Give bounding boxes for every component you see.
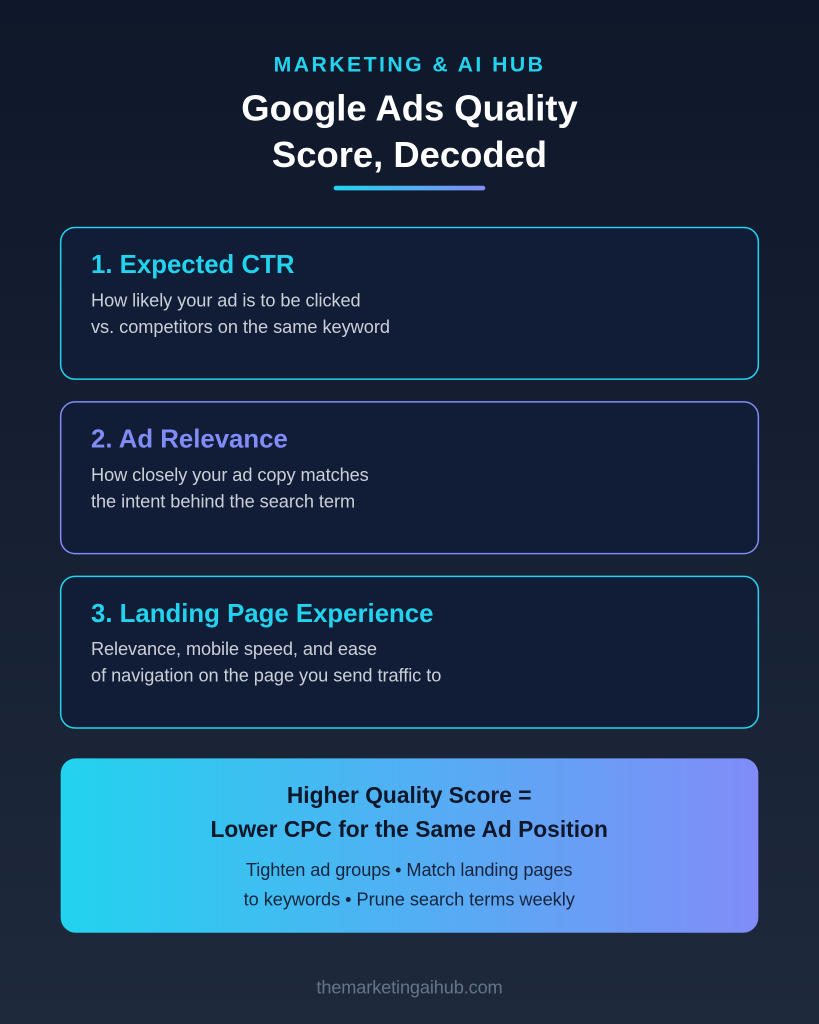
panel: landing page experience: of navigation on the page you send traffic to <box>91 665 441 686</box>
footer: themarketingaihub.com <box>316 977 503 998</box>
title underline <box>334 186 485 190</box>
panel: ad relevance <box>60 401 759 554</box>
panel: expected CTR: How likely your ad is to be clicked <box>91 290 361 311</box>
eyebrow label: MARKETING & AI HUB <box>274 52 545 76</box>
callout text <box>244 860 575 910</box>
panel: landing page experience <box>60 576 759 729</box>
title: Score, Decoded <box>272 135 547 175</box>
callout text: to keywords • Prune search terms weekly <box>244 890 575 910</box>
panel: expected CTR <box>60 227 759 380</box>
panel: ad relevance: the intent behind the search term <box>91 491 355 511</box>
callout text: Tighten ad groups • Match landing pages <box>246 860 572 880</box>
panel: landing page experience: Relevance, mobile speed, and ease <box>91 639 377 660</box>
title: Google Ads Quality <box>241 89 578 129</box>
panel: expected CTR: vs. competitors on the same keyword <box>91 317 390 337</box>
panel: expected CTR: 1. Expected CTR <box>91 250 294 279</box>
callout heading: Higher Quality Score = <box>287 783 532 808</box>
panel: landing page experience: 3. Landing Page Experience <box>91 599 433 628</box>
callout <box>60 758 758 933</box>
callout heading <box>211 783 608 843</box>
panel: ad relevance: 2. Ad Relevance <box>91 424 288 453</box>
callout heading: Lower CPC for the Same Ad Position <box>211 817 608 843</box>
title <box>241 89 578 175</box>
panel: ad relevance: How closely your ad copy matches <box>91 465 369 485</box>
